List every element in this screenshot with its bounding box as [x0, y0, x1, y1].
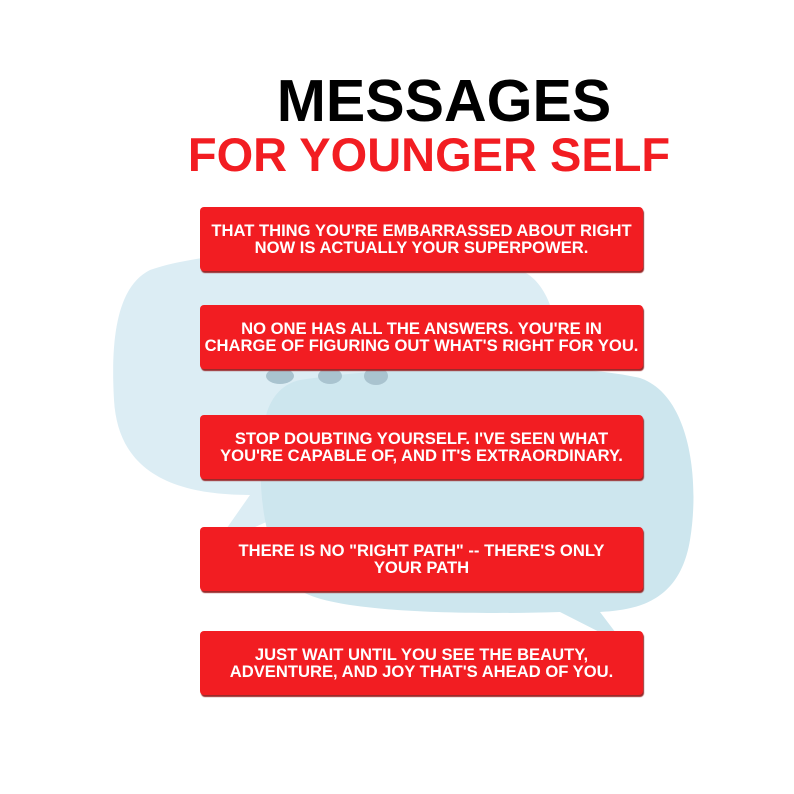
message 4 [200, 527, 643, 591]
message 5 [200, 631, 643, 695]
message 1 [200, 207, 643, 271]
subtitle: FOR YOUNGER SELF [188, 128, 670, 181]
message 3: STOP DOUBTING YOURSELF. I'VE SEEN WHAT [235, 429, 608, 448]
message 3: YOU'RE CAPABLE OF, AND IT'S EXTRAORDINARY. [220, 446, 623, 465]
message 1: NOW IS ACTUALLY YOUR SUPERPOWER. [255, 238, 588, 257]
message 4: THERE IS NO "RIGHT PATH" -- THERE'S ONLY [238, 541, 605, 560]
message 5: ADVENTURE, AND JOY THAT'S AHEAD OF YOU. [230, 662, 613, 681]
message 2: CHARGE OF FIGURING OUT WHAT'S RIGHT FOR YOU. [205, 336, 638, 355]
message 4: YOUR PATH [374, 558, 469, 577]
message 3 [200, 415, 643, 479]
typing dots [266, 367, 388, 385]
message 2: NO ONE HAS ALL THE ANSWERS. YOU'RE IN [241, 319, 602, 338]
bubble: right [261, 366, 693, 645]
bubble: left [113, 249, 559, 545]
message 1: THAT THING YOU'RE EMBARRASSED ABOUT RIGHT [211, 221, 632, 240]
title: MESSAGES [277, 68, 611, 134]
message 5: JUST WAIT UNTIL YOU SEE THE BEAUTY, [255, 645, 588, 664]
message 2 [200, 305, 643, 369]
